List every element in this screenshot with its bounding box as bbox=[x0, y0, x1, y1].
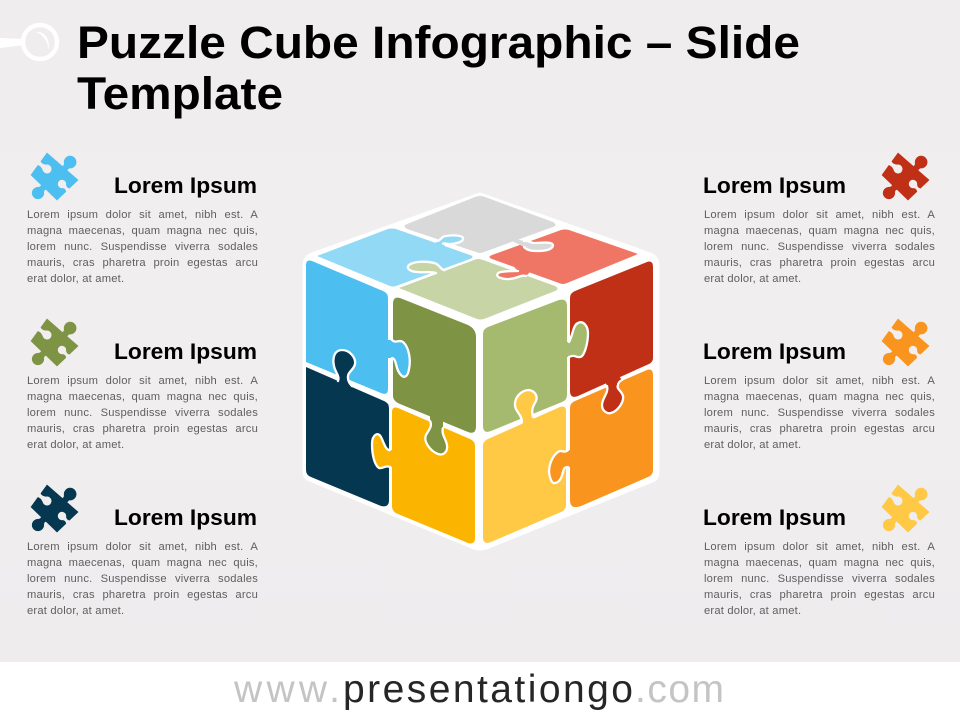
text block: right 1 bbox=[704, 209, 935, 285]
heading: left 3: Lorem Ipsum bbox=[114, 505, 257, 530]
text block: left 3: erat dolor, at amet. bbox=[27, 605, 124, 617]
decorative ring pin bbox=[0, 25, 57, 59]
piece: top salmon bbox=[490, 230, 638, 284]
text block: left 2: lorem nunc. Suspendisse viverra sodales bbox=[27, 407, 258, 419]
text block: left 2 bbox=[27, 375, 258, 451]
text block: left 1: magna maecenas, quam magna nec quis, bbox=[27, 225, 258, 237]
icon: olive puzzle piece bbox=[31, 319, 78, 366]
text block: right 3: Lorem ipsum dolor sit amet, nibh est. A bbox=[704, 541, 935, 553]
piece: yellow side bbox=[392, 408, 475, 543]
text block: right 2: mauris, cras pharetra proin egestas arcu bbox=[704, 423, 935, 435]
heading: right 2: Lorem Ipsum bbox=[703, 339, 846, 364]
footer url: www. bbox=[233, 668, 340, 711]
piece: top grey bbox=[404, 196, 556, 253]
text block: left 1: mauris, cras pharetra proin egestas arcu bbox=[27, 257, 258, 269]
heading: left 1: Lorem Ipsum bbox=[114, 173, 257, 198]
text block: left 2: mauris, cras pharetra proin egestas arcu bbox=[27, 423, 258, 435]
piece: navy side bbox=[306, 367, 389, 506]
text block: left 1: erat dolor, at amet. bbox=[27, 273, 124, 285]
icon: blue puzzle piece bbox=[31, 153, 78, 200]
text block: left 2: erat dolor, at amet. bbox=[27, 439, 124, 451]
text block: left 3: mauris, cras pharetra proin egestas arcu bbox=[27, 589, 258, 601]
puzzle tabs bbox=[333, 235, 623, 483]
piece: orange side bbox=[570, 370, 653, 507]
footer url: .com bbox=[635, 668, 724, 711]
heading: right 1: Lorem Ipsum bbox=[703, 173, 846, 198]
text block: right 3: magna maecenas, quam magna nec quis, bbox=[704, 557, 935, 569]
text block: right 1: magna maecenas, quam magna nec quis, bbox=[704, 225, 935, 237]
piece: olive side bbox=[393, 298, 476, 433]
text block: left 1: Lorem ipsum dolor sit amet, nibh est. A bbox=[27, 209, 258, 221]
text block: right 1: mauris, cras pharetra proin egestas arcu bbox=[704, 257, 935, 269]
icon: yellow puzzle piece bbox=[882, 485, 929, 532]
cube white base bbox=[305, 195, 657, 548]
text block: left 2: magna maecenas, quam magna nec quis, bbox=[27, 391, 258, 403]
footer url: presentationgo bbox=[343, 668, 633, 711]
text block: right 2 bbox=[704, 375, 935, 451]
text block: right 3: mauris, cras pharetra proin egestas arcu bbox=[704, 589, 935, 601]
heading: left 2: Lorem Ipsum bbox=[114, 339, 257, 364]
piece: top pale green bbox=[399, 259, 558, 320]
text block: left 1: lorem nunc. Suspendisse viverra sodales bbox=[27, 241, 258, 253]
text block: right 1: lorem nunc. Suspendisse viverra sodales bbox=[704, 241, 935, 253]
icon: red puzzle piece bbox=[882, 153, 929, 200]
piece: red side bbox=[570, 262, 653, 397]
piece: light yellow side bbox=[483, 406, 566, 543]
text block: left 3: magna maecenas, quam magna nec quis, bbox=[27, 557, 258, 569]
icon: orange puzzle piece bbox=[882, 319, 929, 366]
title: Puzzle Cube Infographic – Slide bbox=[77, 17, 800, 68]
text block: left 3: lorem nunc. Suspendisse viverra sodales bbox=[27, 573, 258, 585]
text block: left 3 bbox=[27, 541, 258, 617]
text block: right 3 bbox=[704, 541, 935, 617]
title bbox=[77, 17, 800, 119]
text block: right 3: lorem nunc. Suspendisse viverra sodales bbox=[704, 573, 935, 585]
text block: right 2: erat dolor, at amet. bbox=[704, 439, 801, 451]
piece: top light blue bbox=[317, 228, 472, 286]
text block: left 3: Lorem ipsum dolor sit amet, nibh est. A bbox=[27, 541, 258, 553]
puzzle cube bbox=[305, 195, 657, 548]
text block: right 2: Lorem ipsum dolor sit amet, nibh est. A bbox=[704, 375, 935, 387]
text block: right 1: erat dolor, at amet. bbox=[704, 273, 801, 285]
text block: left 1 bbox=[27, 209, 258, 285]
text block: right 3: erat dolor, at amet. bbox=[704, 605, 801, 617]
title: Template bbox=[77, 68, 283, 119]
text block: left 2: Lorem ipsum dolor sit amet, nibh est. A bbox=[27, 375, 258, 387]
footer url bbox=[233, 668, 724, 711]
piece: blue side bbox=[306, 260, 388, 394]
text block: right 2: magna maecenas, quam magna nec quis, bbox=[704, 391, 935, 403]
piece: light olive side bbox=[483, 300, 567, 432]
icon: navy puzzle piece bbox=[31, 485, 78, 532]
text block: right 1: Lorem ipsum dolor sit amet, nibh est. A bbox=[704, 209, 935, 221]
text block: right 2: lorem nunc. Suspendisse viverra sodales bbox=[704, 407, 935, 419]
heading: right 3: Lorem Ipsum bbox=[703, 505, 846, 530]
